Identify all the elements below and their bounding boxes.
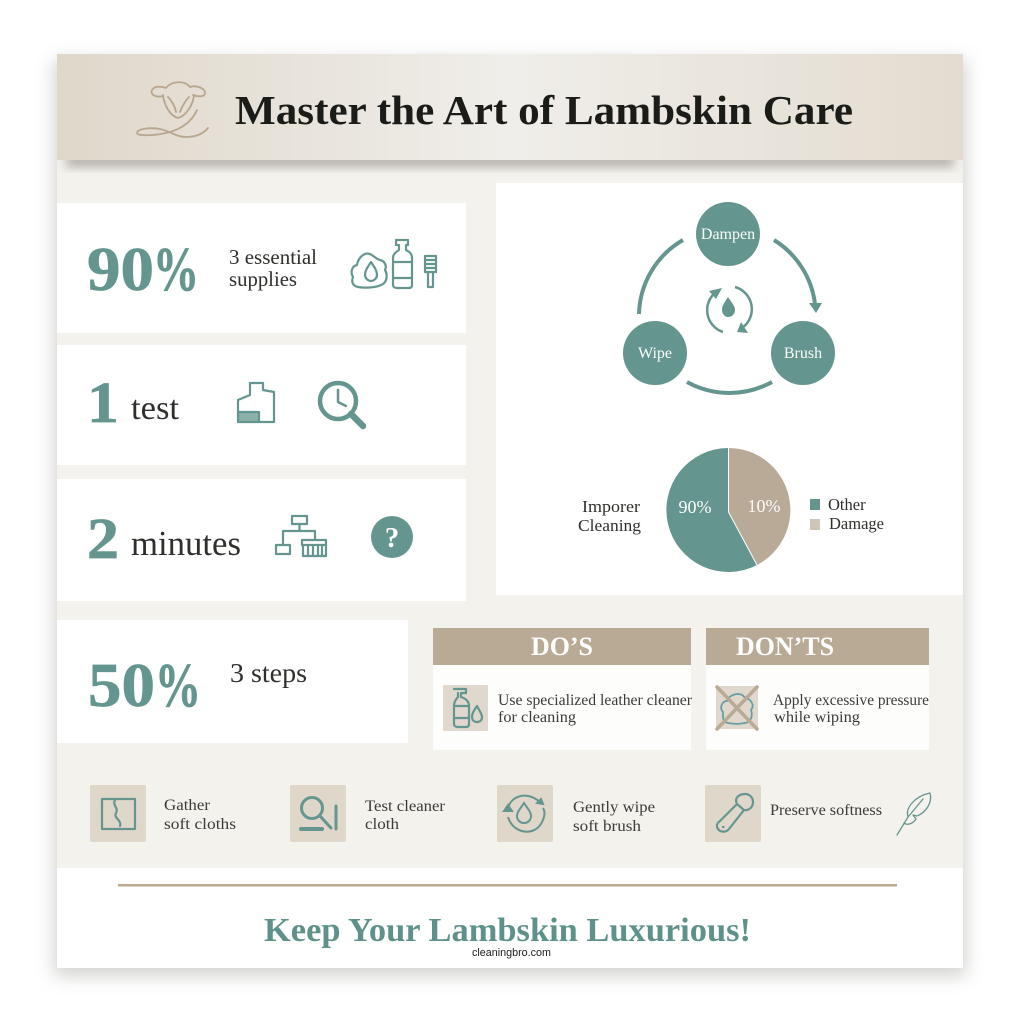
icon: cloth, bottle and brush: [352, 240, 436, 288]
chart: pie: 10%: [748, 496, 780, 516]
panel: 50% 3 steps: [57, 620, 408, 743]
panel: 2 minutes: 2: [87, 506, 119, 571]
icon: crossed cloth: [716, 686, 758, 729]
panel: do's: [433, 628, 693, 750]
panel: 50% 3 steps: 3 steps: [230, 658, 307, 688]
chart: three step cycle: Dampen: [701, 226, 755, 243]
step: gently wipe: soft brush: [573, 818, 641, 835]
panel: footer: [57, 868, 963, 968]
chart: three step cycle: [623, 202, 835, 393]
legend: [810, 495, 884, 533]
step: gather: [90, 785, 236, 842]
icon: sheep logo: [137, 82, 208, 137]
panel: 1 test: 1: [87, 370, 119, 435]
panel: 90% essential supplies: [57, 203, 466, 333]
panel: 90% essential supplies: 3 essential: [229, 245, 317, 269]
icon: flow chart with brush: [276, 516, 326, 556]
step: preserve softness: [705, 785, 931, 842]
panel: 50% 3 steps: 50: [88, 652, 155, 720]
panel: do's: DO’S: [531, 632, 593, 661]
icon: water drop with cycle arrows: [707, 287, 752, 333]
icon: cloth square: [102, 799, 135, 829]
icon: feather: [897, 793, 931, 835]
panel: don'ts: [706, 628, 929, 750]
panel: do's: for cleaning: [498, 709, 576, 726]
legend: Other: [828, 495, 866, 514]
step: test cleaner: Test cleaner: [365, 798, 446, 815]
panel: do's: Use specialized leather cleaner: [498, 692, 693, 709]
panel: don'ts: Apply excessive pressure: [773, 692, 929, 709]
panel: process cycle and pie chart: [496, 183, 963, 595]
chart: pie: [578, 448, 884, 572]
step: gently wipe: [497, 785, 655, 842]
panel: 2 minutes: [57, 479, 466, 601]
panel: 50% 3 steps: %: [155, 652, 201, 720]
icon: drop with arrows: [504, 796, 544, 832]
chart: pie: 90%: [678, 497, 712, 517]
icon: magnifier with clock: [320, 383, 363, 426]
icon: soft brush tool: [717, 794, 753, 832]
label: pie caption: Cleaning: [578, 516, 641, 535]
source credit: cleaningbro.com: [472, 947, 551, 959]
icon: cleaner bottle: [443, 685, 488, 731]
panel: 90% essential supplies: %: [153, 236, 199, 304]
step: test cleaner: [290, 785, 446, 842]
step: gently wipe: Gently wipe: [573, 799, 655, 816]
icon: question mark: ?: [385, 522, 399, 554]
icon: magnifier test: [301, 798, 336, 829]
icon: question mark: [371, 516, 413, 558]
header banner: [57, 54, 963, 167]
panel: don'ts: while wiping: [774, 709, 860, 726]
label: pie caption: [578, 497, 641, 535]
title: Master the Art of Lambskin Care: [235, 87, 853, 133]
step: gather: Gather: [164, 797, 211, 814]
label: pie caption: Imporer: [582, 497, 640, 516]
step: gather: soft cloths: [164, 816, 236, 833]
panel: don'ts: DON’TS: [736, 632, 834, 661]
panel: 90% essential supplies: 90: [87, 236, 154, 304]
legend: Damage: [829, 514, 884, 533]
icon: test patch: [238, 383, 274, 422]
closing message: Keep Your Lambskin Luxurious!: [264, 912, 751, 949]
panel: 1 test: [57, 345, 466, 465]
chart: three step cycle: Wipe: [638, 345, 672, 362]
panel: 1 test: test: [131, 390, 180, 427]
step: preserve softness: Preserve softness: [770, 802, 882, 819]
panel: 2 minutes: minutes: [131, 524, 241, 563]
chart: three step cycle: Brush: [784, 345, 822, 362]
panel: 90% essential supplies: supplies: [229, 267, 297, 291]
step: test cleaner: cloth: [365, 816, 399, 833]
